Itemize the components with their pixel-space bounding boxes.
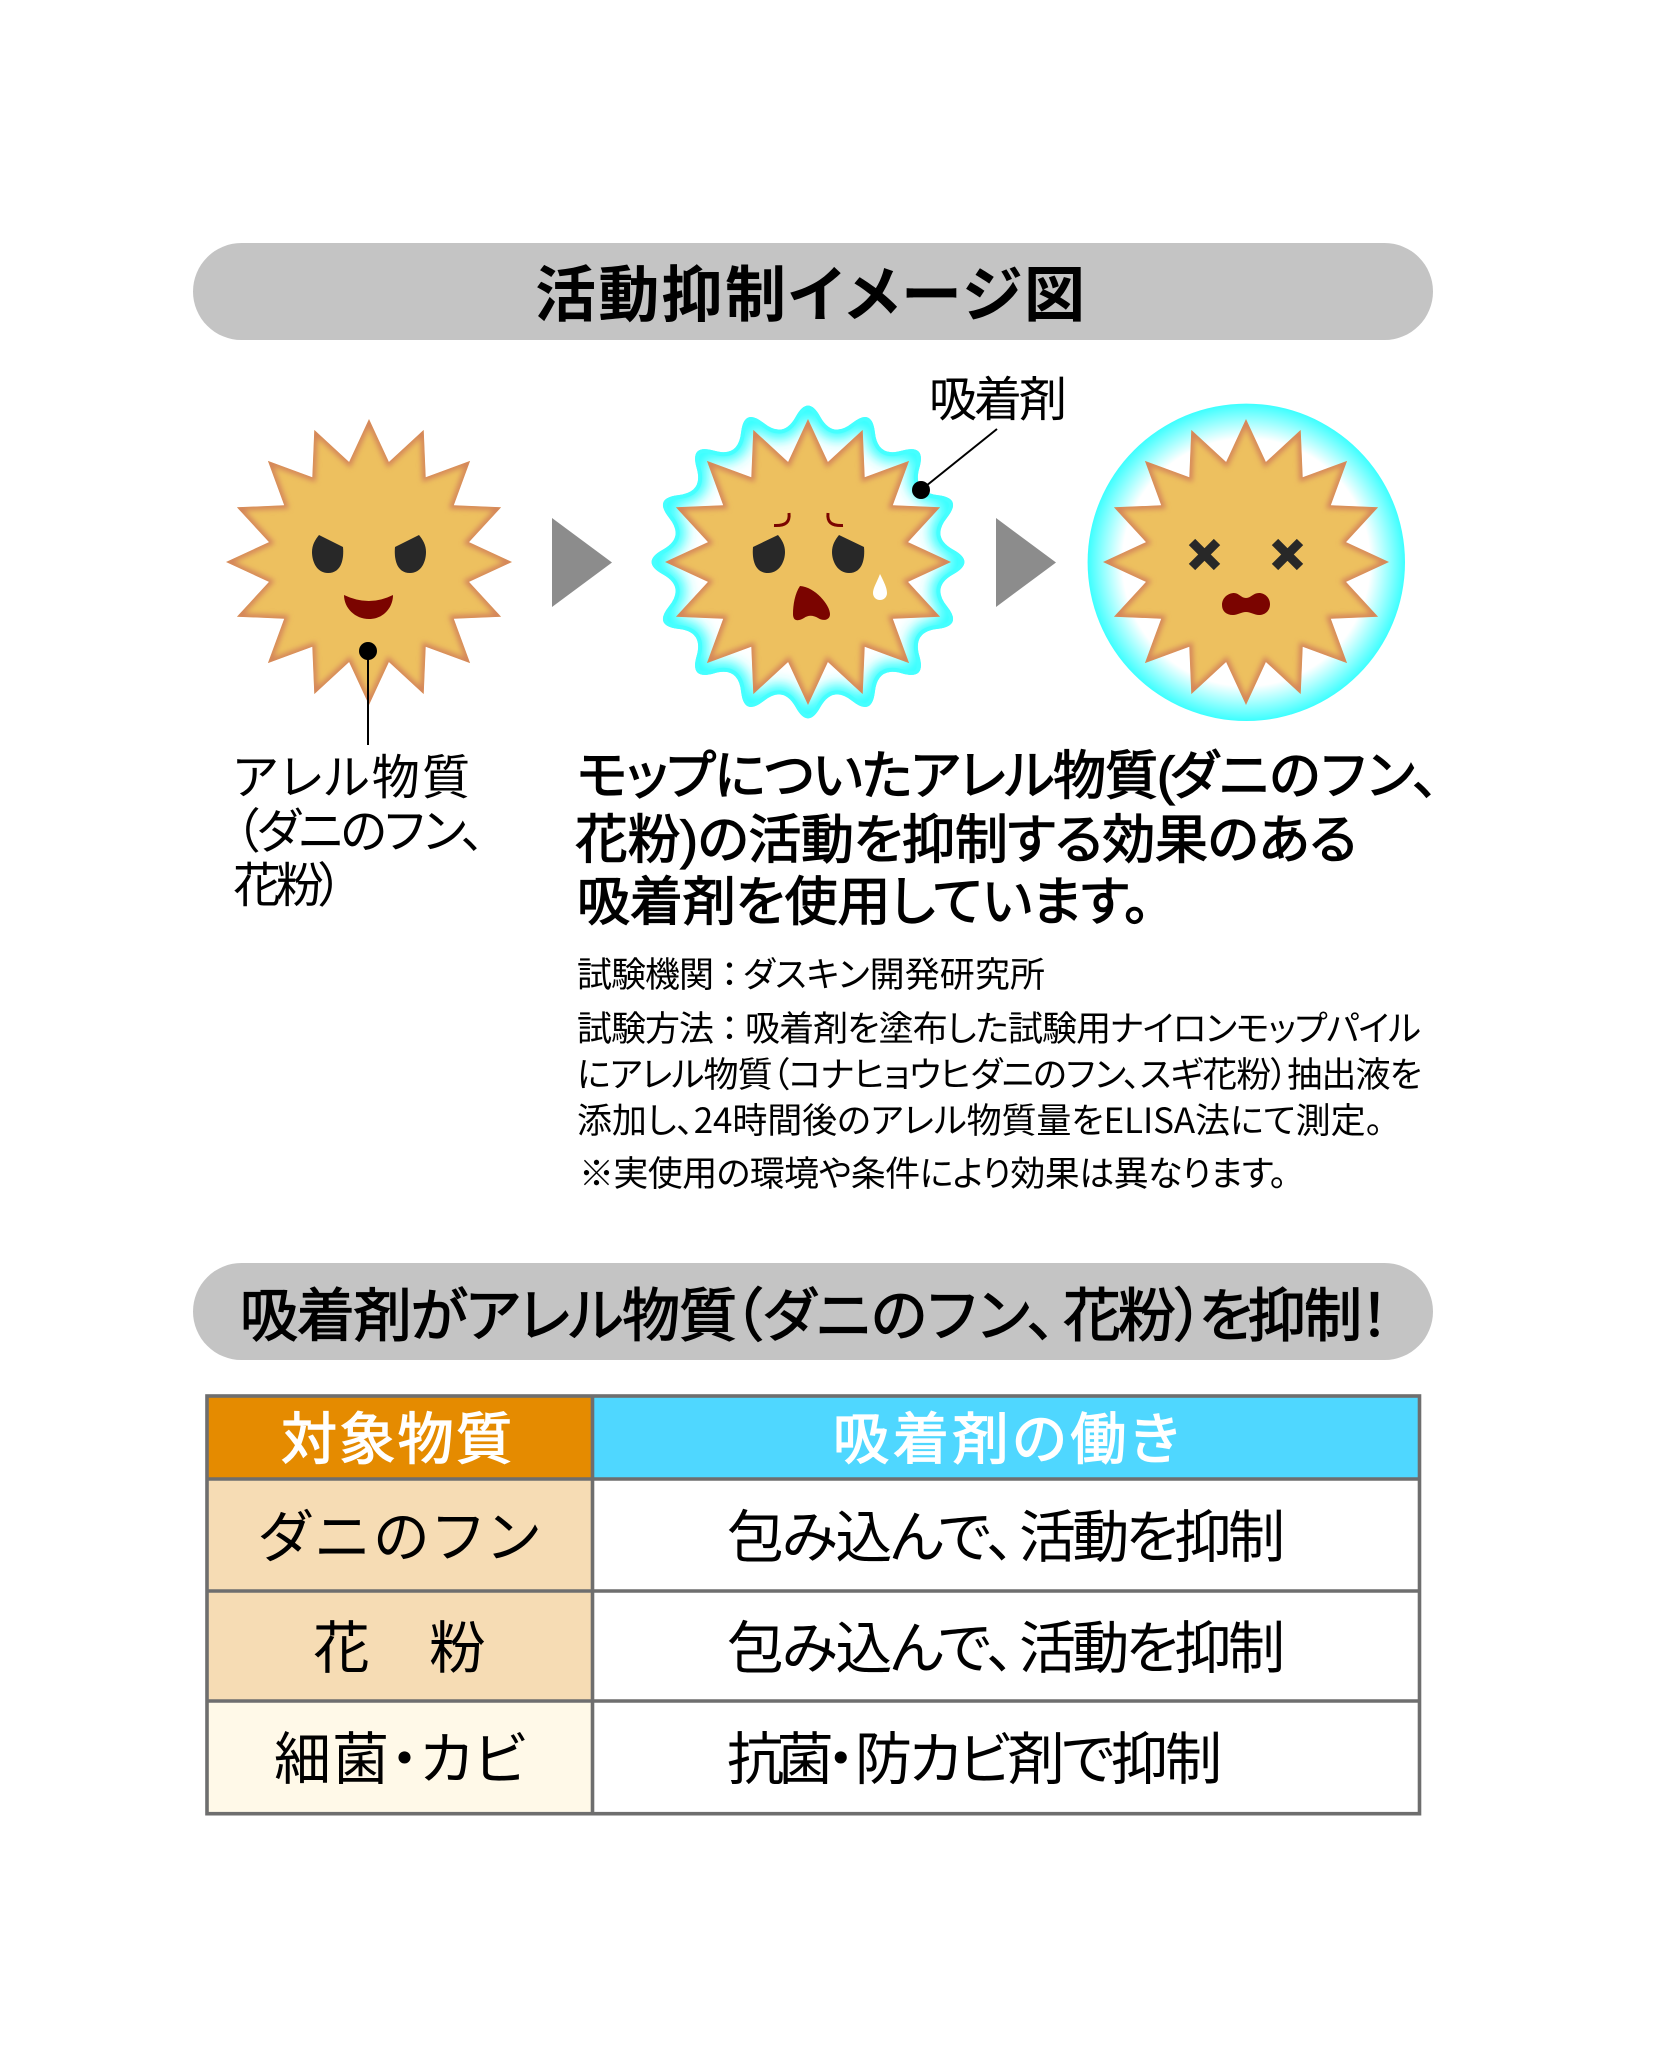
arrow: first step [552, 518, 612, 607]
heading pill: 吸着剤がアレル物質を抑制: を [1199, 1284, 1253, 1349]
table cell fills [207, 1396, 1420, 1814]
text block: allergen label: （ダニのフン、 [235, 806, 485, 859]
heading pill: 活動抑制イメージ図 [193, 243, 1433, 340]
text block: test details [577, 956, 1422, 1194]
table: adsorbent action by substance [207, 1396, 1420, 1814]
row 1 action: 活動を抑制 [1019, 1506, 1285, 1570]
heading pill: 吸着剤がアレル物質を抑制: ） [1175, 1284, 1204, 1349]
text block: main statement: ( [1157, 747, 1175, 806]
text block: test details: にアレル物質（コナヒョウヒダニのフン、スギ花粉）抽出液を [577, 1056, 1422, 1095]
text block: allergen label: アレル物質 [233, 752, 470, 805]
text block: test details: 試験方法 [577, 1010, 714, 1049]
icon: x eyes [1192, 542, 1300, 567]
text block: test details: ： [712, 1010, 747, 1049]
text block: allergen label [233, 752, 485, 913]
arrow: second step [996, 518, 1056, 607]
text block: main statement [575, 747, 1439, 932]
icon: angry mite [226, 419, 512, 705]
icon: sad mite right eye [832, 535, 864, 573]
row 1 substance: ダニのフン [258, 1506, 539, 1570]
table header: adsorbent action: 吸着剤の働き [833, 1408, 1179, 1471]
label: adsorbent: 吸着剤 [929, 374, 1067, 427]
icon: sad mite mouth [793, 586, 830, 620]
row 3 action: 防カビ剤で抑制 [855, 1728, 1222, 1792]
adsorbent sphere [1088, 404, 1405, 721]
heading pill: 吸着剤がアレル物質を抑制: 吸着剤がアレル物質 [240, 1284, 737, 1349]
text block: allergen label: 花粉） [233, 860, 343, 913]
icon: sad mite left eye [753, 535, 785, 573]
heading pill: 吸着剤がアレル物質を抑制: ！ [1360, 1284, 1389, 1349]
adsorbent halo [652, 406, 964, 718]
diagram: mite inactivated inside sphere [1088, 404, 1405, 721]
row 1 action: 包み込んで、 [727, 1506, 1015, 1570]
heading pill: 吸着剤がアレル物質を抑制: （ダニのフン、 [733, 1284, 1056, 1349]
text block: test details: 添加し、24時間後のアレル物質量をELISA法にて測定。 [577, 1093, 1383, 1144]
icon: sad mite eyebrows [774, 513, 843, 526]
text block: test details: 吸着剤を塗布した試験用ナイロンモップパイル [745, 1010, 1421, 1049]
row 2 action: 包み込んで、 [727, 1617, 1015, 1681]
row 1 action [727, 1506, 1285, 1570]
icon: angry mite right eye [395, 535, 426, 573]
heading pill: 活動抑制イメージ図: 活動抑制イメージ図 [535, 261, 1085, 329]
icon: angry mite mouth [344, 595, 393, 619]
row 3 action: 抗菌・ [727, 1728, 855, 1792]
text block: test details: ： [712, 956, 747, 995]
text block: main statement: 吸着剤を使用しています。 [577, 873, 1150, 932]
text block: main statement: モップについたアレル物質 [577, 747, 1158, 806]
text block: test details: ※実使用の環境や条件により効果は異なります。 [579, 1155, 1287, 1194]
diagram: mite before adsorbent [226, 419, 512, 745]
leader line to adsorbent label [912, 429, 997, 499]
icon: sad mite [665, 419, 951, 705]
leader line to allergen label [359, 642, 377, 745]
diagram: mite wrapped in adsorbent [652, 406, 997, 718]
heading pill: 吸着剤がアレル物質を抑制: 抑制 [1248, 1284, 1362, 1349]
table grid [207, 1396, 1420, 1814]
text block: main statement: 花粉)の活動を抑制する効果のある [575, 811, 1357, 870]
heading pill: 吸着剤がアレル物質を抑制 [193, 1263, 1433, 1360]
text block: test details: 試験機関 [577, 956, 714, 995]
heading pill: 吸着剤がアレル物質を抑制: 花粉 [1063, 1284, 1176, 1349]
text block: main statement: ダニのフン、 [1170, 747, 1439, 806]
icon: angry mite left eye [312, 535, 343, 573]
icon: tear drop [873, 574, 887, 600]
text block: test details: ダスキン開発研究所 [743, 956, 1045, 995]
table header: substance: 対象物質 [281, 1408, 512, 1471]
row 3 substance: 細菌・カビ [274, 1728, 526, 1792]
row 2 action: 活動を抑制 [1019, 1617, 1285, 1681]
row 2 action [727, 1617, 1285, 1681]
icon: inactive mite [1103, 419, 1389, 705]
row 2 substance: 花 粉 [313, 1617, 486, 1681]
icon: inactive mite mouth [1222, 593, 1270, 615]
